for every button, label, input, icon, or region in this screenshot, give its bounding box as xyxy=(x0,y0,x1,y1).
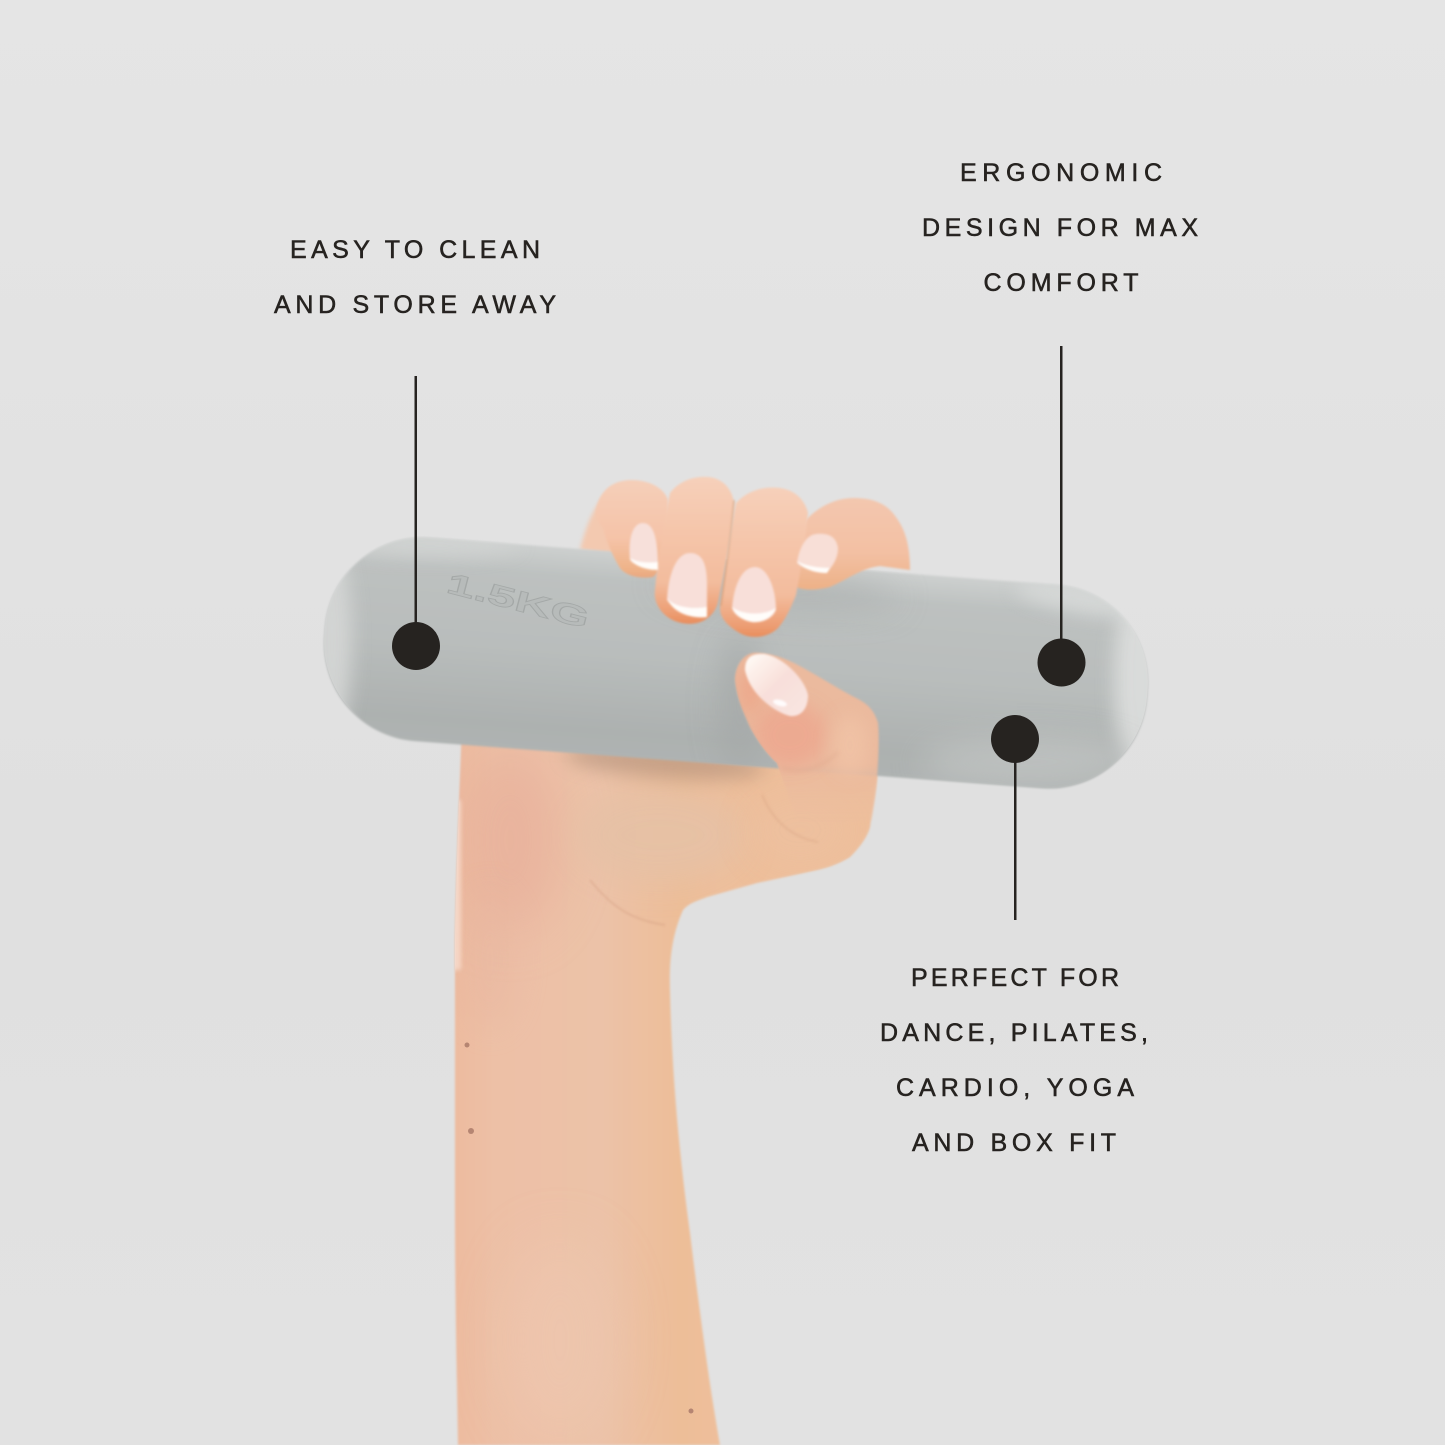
illustration: arm holding dumbbell xyxy=(312,477,1166,1445)
callout text: PERFECT FOR xyxy=(911,964,1123,992)
finger 1 xyxy=(596,480,668,578)
leader line xyxy=(414,376,417,626)
leader line xyxy=(1060,346,1062,642)
back of hand behind fingers xyxy=(580,490,640,560)
nail 3 xyxy=(732,567,776,622)
callout text: DANCE, PILATES, xyxy=(880,1019,1152,1047)
arm and palm xyxy=(452,700,878,1445)
callout text: ERGONOMIC xyxy=(960,159,1166,187)
callout text: AND STORE AWAY xyxy=(274,291,560,319)
callout: easy to clean xyxy=(274,236,560,670)
callout text: EASY TO CLEAN xyxy=(290,236,544,264)
finger 2 xyxy=(655,477,734,624)
callout text: AND BOX FIT xyxy=(912,1129,1120,1157)
marker dot xyxy=(991,715,1039,763)
finger divider line xyxy=(721,500,734,606)
nail 1 xyxy=(630,523,658,570)
thumb xyxy=(735,653,879,830)
skin marks xyxy=(464,1042,694,1414)
callout text: COMFORT xyxy=(984,269,1142,297)
embossed label 1.5KG: 1.5KG xyxy=(443,568,593,635)
dumbbell xyxy=(312,530,1166,796)
nail 4 xyxy=(797,534,838,573)
marker dot xyxy=(1038,638,1086,686)
leader line xyxy=(1014,760,1016,920)
marker dot xyxy=(392,622,440,670)
finger 3 xyxy=(720,488,808,637)
thumb nail xyxy=(745,654,808,716)
finger 4 xyxy=(793,498,910,590)
callout text: CARDIO, YOGA xyxy=(896,1074,1138,1102)
nail 2 xyxy=(667,553,707,617)
callout: ergonomic design xyxy=(922,159,1202,686)
callout: perfect for xyxy=(880,715,1152,1157)
callout text: DESIGN FOR MAX xyxy=(922,214,1202,242)
